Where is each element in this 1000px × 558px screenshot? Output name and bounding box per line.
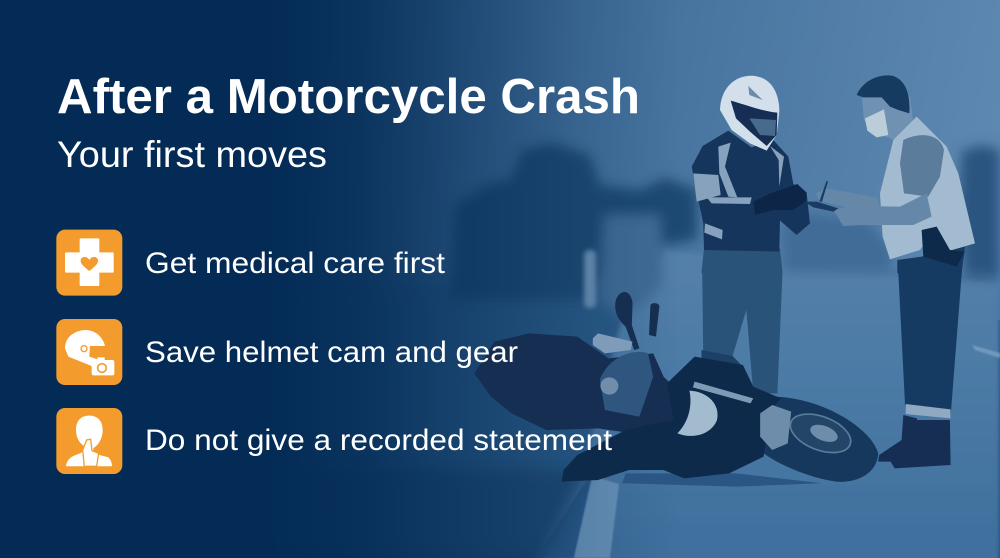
wheel disc [785, 406, 856, 460]
instrument panel [593, 333, 632, 353]
icon: helmet and camera [56, 319, 122, 385]
list item: medical care [56, 230, 446, 296]
road surface [530, 250, 1000, 558]
lane marking [972, 345, 1000, 358]
mirror [615, 292, 639, 350]
clipboard [804, 202, 838, 212]
rider boots behind bike [702, 350, 743, 367]
title: After a Motorcycle Crash [57, 70, 640, 124]
text: medical care: Get medical care first [145, 247, 446, 280]
front tyre [760, 397, 878, 482]
helmet [720, 76, 779, 151]
officer trousers lower [898, 270, 962, 417]
officer shirt sleeve [900, 135, 944, 197]
rider in helmet and jacket [692, 76, 810, 273]
icon: person with finger on lips [56, 408, 122, 474]
gravel shoulder texture [300, 470, 590, 558]
subtitle: Your first moves [57, 134, 327, 175]
glove [753, 184, 807, 215]
wheel hub [808, 421, 840, 445]
rider jeans lower [702, 270, 783, 393]
belt area [922, 227, 965, 267]
seat and rear bodywork [474, 333, 684, 437]
trouser reflective band [906, 404, 951, 418]
officer in vest [804, 75, 975, 273]
fork panel [760, 405, 791, 450]
list item: no recorded statement [56, 408, 613, 474]
text: helmet cam: Save helmet cam and gear [145, 336, 518, 369]
ground base [0, 280, 1000, 558]
handlebar grip [649, 303, 659, 337]
rider jeans [701, 248, 783, 273]
officer trousers [897, 247, 965, 273]
list item: helmet cam [56, 319, 518, 385]
icon: medical cross with heart [56, 230, 122, 296]
hi-vis vest [880, 117, 975, 259]
officer head [857, 75, 913, 140]
text: no recorded statement: Do not give a recorded statement [145, 424, 613, 457]
pen [819, 181, 828, 202]
road shoulder shadow [536, 475, 595, 558]
officer forearms [816, 188, 932, 226]
tank emblem [600, 377, 618, 395]
roadside post [584, 250, 596, 308]
distant tree line [450, 143, 1000, 320]
fallen motorcycle [474, 270, 962, 487]
officer boots [878, 415, 951, 468]
rider jacket [692, 131, 810, 252]
headlight [677, 391, 718, 436]
frame and engine [562, 357, 781, 482]
jacket reflective panels [693, 143, 784, 239]
white edge line [574, 476, 619, 558]
chrome fork bar [693, 382, 753, 403]
tank panel [600, 352, 653, 417]
sky [0, 0, 1000, 320]
ground shadow [622, 473, 822, 487]
